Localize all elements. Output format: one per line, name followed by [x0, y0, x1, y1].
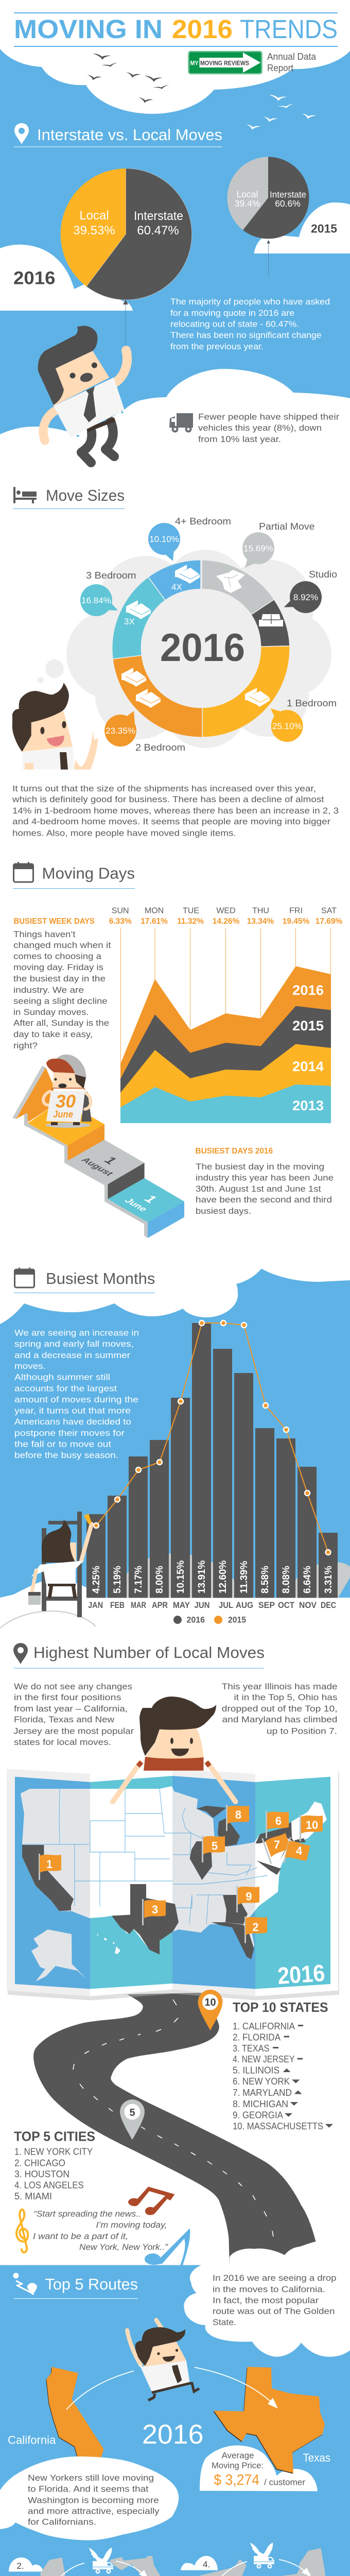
bar values: 8.08%	[281, 1566, 292, 1594]
route 4: massachusetts to new york: 4.	[203, 2560, 210, 2569]
text: local left: Jersey are the most popular	[13, 1726, 134, 1736]
route 2: new york to florida: 2.	[16, 2561, 24, 2571]
top 5 cities list: 5. MIAMI	[14, 2191, 52, 2201]
heading: moving days	[13, 862, 135, 889]
dark states	[22, 1806, 306, 1959]
text: seasons: and a decrease in summer	[14, 1350, 130, 1360]
sky panel: top 5 routes	[0, 2265, 350, 2576]
icon: truck	[169, 413, 193, 433]
weekday table header: THU	[252, 906, 269, 915]
text: busiest week days: industry. We are	[13, 985, 84, 995]
map pin: 5	[120, 2099, 145, 2140]
state flags: 9	[246, 1890, 252, 1903]
heading: top 5 routes: Top 5 Routes	[45, 2275, 138, 2293]
callout: 3 bedroom: 16.84%	[81, 596, 111, 605]
cloud callout: california drop: State.	[213, 2317, 236, 2327]
bar values: 3.31%	[323, 1566, 334, 1594]
weekday table header: SAT	[321, 906, 337, 915]
isometric steps: 1	[141, 1193, 161, 1205]
weekday table header: BUSIEST WEEK DAYS	[13, 917, 95, 926]
route arrows	[66, 2367, 278, 2410]
character: painter on ladder	[0, 1512, 96, 1628]
pie chart 2015: 60.6%	[275, 198, 301, 209]
text: seasons: before the busy season.	[14, 1450, 118, 1460]
text: busiest week days: in Sunday moves.	[13, 1007, 89, 1017]
heading: interstate vs local	[14, 123, 222, 147]
weekday table header: 6.33%	[109, 917, 132, 926]
pie chart 2016	[61, 168, 192, 300]
text: vehicles: from 10% last year.	[198, 434, 281, 444]
sky panel: busiest months	[0, 1268, 350, 1598]
state flags: 1	[46, 1858, 52, 1871]
callout: 1 bedroom: 25.10%	[272, 721, 302, 731]
text: busiest week days: right?	[13, 1041, 38, 1050]
cloud callout: california drop: route was out of The Golden	[213, 2306, 335, 2316]
state flags: 10	[306, 1819, 318, 1832]
callout: partial move	[242, 521, 315, 568]
report label: Annual Data	[267, 52, 317, 62]
weekday table header: MON	[145, 906, 164, 915]
bar values	[91, 1560, 334, 1594]
weekday table header: FRI	[289, 906, 303, 915]
isometric steps: August	[79, 1156, 116, 1177]
text: busiest week days: the busiest day in the	[13, 974, 106, 984]
route 2: new york to florida	[9, 2548, 171, 2576]
pie chart 2016: 60.47%	[137, 224, 179, 238]
text: local left: from last year – California,	[14, 1704, 128, 1714]
cloud callout: new yorkers: for Californians.	[28, 2517, 96, 2527]
top 5 cities list	[14, 2099, 145, 2201]
title	[14, 12, 338, 47]
heading: interstate vs local: Interstate vs. Local Moves	[37, 126, 222, 144]
year label: 2016	[142, 2419, 204, 2450]
text: shipment sizes	[12, 784, 339, 838]
callout: studio	[284, 569, 337, 613]
text: local right: This year Illinois has made	[222, 1682, 338, 1691]
text: busiest week days: seeing a slight decline	[13, 996, 108, 1006]
callout: partial move: Partial Move	[259, 521, 315, 532]
song lyric: “Start spreading the news..	[33, 2209, 141, 2218]
map pin: 5: 5	[129, 2107, 135, 2119]
report label: Report	[267, 63, 293, 73]
text: vehicles: vehicles this year (8%), down	[198, 423, 322, 433]
song lyric	[33, 2209, 168, 2252]
sky panel: header and interstate vs local	[0, 0, 350, 443]
price cloud	[200, 2445, 318, 2491]
bottom cloud of sky panel	[0, 369, 350, 453]
month labels: APR	[152, 1600, 168, 1610]
callout: 4+ bedroom: 4+ Bedroom	[175, 516, 231, 527]
cloud callout: new yorkers: and more attractive, especially	[28, 2506, 160, 2516]
donut center year: 2016	[160, 626, 245, 670]
text: majority: The majority of people who have asked	[170, 297, 330, 307]
month labels: JAN	[88, 1600, 103, 1610]
heading: moving days: Moving Days	[42, 865, 135, 883]
donut chart	[112, 560, 290, 737]
top 5 cities list: TOP 5 CITIES	[14, 2129, 95, 2144]
month labels: JUL	[219, 1600, 233, 1610]
text: local right	[222, 1682, 338, 1736]
text: busiest week days: day to take it easy,	[13, 1029, 93, 1039]
top 10 states list: 4. NEW JERSEY	[233, 2054, 294, 2064]
weekday table header: 19.45%	[283, 917, 309, 926]
heading: busiest months	[14, 1267, 155, 1293]
state: texas: Texas	[303, 2451, 330, 2464]
month labels: OCT	[278, 1600, 295, 1610]
heading: highest number of local moves	[13, 1643, 265, 1668]
month labels: AUG	[236, 1600, 253, 1610]
text: local right: dropped out of the Top 10,	[222, 1704, 338, 1714]
text: busiest days: BUSIEST DAYS 2016	[196, 1147, 273, 1156]
callout: 1 bedroom: 1 Bedroom	[287, 698, 337, 708]
cloud 2016	[0, 245, 133, 311]
pie chart 2016: 39.53%	[73, 224, 115, 238]
text: seasons	[14, 1328, 139, 1460]
callout: 4+ bedroom: 10.10%	[149, 534, 179, 544]
callout: 2 bedroom	[104, 711, 185, 753]
average moving price: Moving Price:	[212, 2461, 264, 2470]
weekday table header: WED	[216, 906, 236, 915]
character: man with calendar	[43, 1055, 92, 1128]
cloud callout: new yorkers: New Yorkers still love moving	[28, 2473, 154, 2483]
state: texas	[213, 2367, 330, 2474]
weekday table header: TUE	[183, 906, 199, 915]
text: local left: in the first four positions	[14, 1692, 121, 1702]
top 10 states list: 8. MICHIGAN	[233, 2098, 288, 2109]
heading: busiest months: Busiest Months	[46, 1269, 155, 1287]
birds white	[246, 95, 316, 132]
weekday table header: 14.26%	[213, 917, 239, 926]
character: thinking man	[12, 683, 98, 770]
bar values: 11.39%	[239, 1561, 250, 1594]
callout: 3 bedroom: 3 Bedroom	[86, 570, 136, 581]
road with route	[33, 1993, 319, 2267]
average moving price: Average	[221, 2450, 254, 2460]
cloud 2015	[254, 202, 350, 253]
top 10 states list: 1. CALIFORNIA	[233, 2021, 295, 2031]
text: busiest days: busiest days.	[196, 1206, 251, 1216]
area chart: moving days	[120, 928, 331, 1123]
legend	[173, 1615, 246, 1625]
text: seasons: postpone their moves for	[14, 1428, 125, 1438]
top 10 states list: 6. NEW YORK	[233, 2076, 290, 2087]
character: man over map	[113, 1697, 236, 1802]
bar values: 8.00%	[154, 1566, 165, 1594]
song lyric: I’m moving today,	[96, 2220, 167, 2230]
cloud 2016: 2016	[13, 268, 56, 289]
state flags: 2	[252, 1921, 259, 1934]
folded map	[7, 1768, 339, 2001]
logo: my moving reviews sign: MOVING REVIEWS	[200, 60, 249, 67]
music notes	[16, 2187, 190, 2265]
cloud callout: new yorkers: to Florida. And it seems that	[28, 2484, 149, 2494]
legend: 2016	[186, 1615, 205, 1625]
text: local left	[13, 1682, 134, 1747]
text: busiest days: have been the second and third	[196, 1195, 332, 1205]
cloud callout: california drop	[184, 2239, 350, 2357]
text: local left: We do not see any changes	[14, 1682, 132, 1691]
bar values: 6.64%	[302, 1566, 313, 1594]
text: local right: it in the Top 5, Ohio has	[234, 1692, 338, 1702]
character: man with calendar: June	[53, 1109, 73, 1120]
weekday table header: 13.34%	[247, 917, 274, 926]
area chart: moving days: 2015	[292, 1018, 324, 1033]
area chart: moving days: 2013	[292, 1098, 324, 1113]
logo: my moving reviews sign	[188, 51, 262, 74]
text: seasons: Although summer still	[14, 1372, 110, 1382]
song lyric: I want to be a part of it,	[33, 2231, 128, 2241]
line chart 2015	[94, 1320, 330, 1555]
cloud 2015: 2015	[311, 222, 337, 235]
text: busiest week days	[13, 929, 111, 1050]
weekday table header: 17.69%	[316, 917, 342, 926]
month labels: MAY	[173, 1600, 190, 1610]
text: seasons: We are seeing an increase in	[14, 1328, 139, 1338]
text: local right: up to Position 7.	[267, 1726, 337, 1736]
text: shipment sizes: It turns out that the size of the shipments has increased over this year,	[12, 784, 316, 793]
area chart: moving days: 2016	[292, 982, 324, 998]
top 5 cities list: 4. LOS ANGELES	[14, 2180, 84, 2191]
title: 2016	[172, 14, 233, 44]
text: shipment sizes: and 4-bedroom home moves. It seems that people are moving into bigger	[12, 817, 330, 826]
pie chart 2015: Local	[237, 189, 258, 199]
weekday table header: SUN	[112, 906, 129, 915]
pie chart 2015: Interstate	[270, 190, 306, 200]
heading: top 5 routes	[13, 2273, 138, 2299]
text: busiest days	[196, 1147, 334, 1216]
map pin: 10: 10	[204, 1997, 216, 2008]
character: man with calendar: 30	[56, 1091, 76, 1112]
map pin: 10	[198, 1990, 222, 2030]
callout: 2 bedroom: 2 Bedroom	[135, 742, 185, 753]
bar values: 7.17%	[133, 1566, 144, 1594]
state: california: California	[8, 2433, 56, 2446]
character: jumping man	[127, 2320, 199, 2400]
top 10 states list	[198, 1990, 333, 2131]
top 10 states list: 10. MASSACHUSETTS	[233, 2121, 323, 2131]
text: majority	[170, 297, 330, 351]
state flags: 7	[274, 1838, 280, 1851]
weekday table header: 17.61%	[141, 917, 168, 926]
month labels	[88, 1600, 336, 1610]
pie chart 2016: Interstate	[134, 209, 183, 223]
map year: 2016	[276, 1959, 326, 1989]
month labels: MAR	[131, 1600, 146, 1610]
month labels: NOV	[299, 1600, 317, 1610]
title: TRENDS	[240, 14, 338, 44]
text: busiest week days: comes to choosing a	[13, 952, 102, 961]
pie chart 2015: 39.4%	[235, 198, 260, 209]
text: busiest days: The busiest day in the moving	[196, 1162, 324, 1172]
text: vehicles: Fewer people have shipped their	[198, 412, 339, 421]
text: seasons: the fall or to move out	[14, 1439, 111, 1449]
callout: 2 bedroom: 23.35%	[106, 726, 135, 736]
text: local left: states for local moves.	[14, 1737, 111, 1747]
cloud callout: california drop: In fact, the most popular	[213, 2296, 319, 2305]
area chart: moving days: 2014	[292, 1059, 324, 1074]
callout: 3 bedroom	[80, 570, 136, 616]
cloud callout: new yorkers: Washington is becoming more	[28, 2495, 159, 2505]
text: majority: from the previous year.	[170, 342, 264, 351]
bar values: 5.19%	[112, 1566, 123, 1594]
month labels: SEP	[258, 1600, 275, 1610]
text: busiest week days: changed much when it	[13, 940, 111, 950]
text: busiest days: 30th. August 1st and June 1st	[196, 1184, 321, 1194]
average moving price: $ 3,274	[214, 2472, 259, 2488]
text: vehicles	[198, 412, 339, 444]
title: MOVING IN	[14, 14, 163, 44]
callout: studio: 8.92%	[293, 592, 318, 602]
state flags: 5	[212, 1839, 218, 1853]
donut icons: 3X	[124, 617, 135, 626]
legend: 2015	[228, 1615, 246, 1625]
report label	[267, 52, 317, 73]
heading: move sizes	[13, 486, 125, 509]
character: hanging man	[38, 326, 127, 463]
average moving price: / customer	[264, 2478, 305, 2487]
top 10 states list: 9. GEORGIA	[233, 2110, 284, 2121]
text: majority: for a moving quote in 2016 are	[170, 308, 294, 318]
song lyric: New York, New York..”	[79, 2242, 168, 2252]
bar values: 4.25%	[91, 1566, 102, 1594]
text: shipment sizes: homes. Also, more people have moved single items.	[12, 828, 236, 838]
text: seasons: accounts for the largest	[14, 1384, 117, 1394]
top 5 cities list: 3. HOUSTON	[14, 2168, 69, 2179]
text: local left: Florida, Texas and New	[14, 1715, 115, 1724]
route 4: massachusetts to new york	[181, 2543, 343, 2576]
month labels: FEB	[110, 1600, 125, 1610]
callout: partial move: 15.69%	[243, 544, 273, 553]
weekday table header	[13, 906, 342, 926]
text: local right: and Maryland has climbed	[222, 1715, 338, 1724]
thought cloud	[38, 550, 331, 748]
bar chart: busiest months	[86, 1323, 338, 1610]
isometric steps: 1	[100, 1155, 121, 1166]
pie chart 2015	[227, 157, 309, 239]
callout: 1 bedroom	[271, 698, 337, 742]
isometric steps	[12, 1065, 184, 1238]
text: shipment sizes: 14% in 1-bedroom home moves, whereas there has been an increase in 2, 3	[12, 806, 339, 816]
donut icons: 4X	[171, 582, 182, 592]
cloud callout: new yorkers	[0, 2456, 179, 2540]
top 10 states list: 3. TEXAS	[233, 2043, 269, 2054]
hills behind bars	[0, 1553, 350, 1598]
birds dark	[86, 54, 170, 105]
heading: highest number of local moves: Highest Number of Local Moves	[33, 1643, 265, 1662]
state flags: 4	[296, 1844, 303, 1857]
text: busiest days: industry this year has been June	[196, 1173, 334, 1183]
text: majority: relocating out of state - 60.47%.	[170, 319, 299, 329]
state flags: 3	[152, 1903, 158, 1916]
top 10 states list: 5. ILLINOIS	[233, 2065, 279, 2076]
text: majority: There has been no significant change	[170, 330, 321, 340]
balloon strings	[123, 240, 270, 346]
callout: studio: Studio	[309, 569, 337, 580]
top 10 states list: 2. FLORIDA	[233, 2032, 281, 2042]
text: seasons: year, it turns out that more	[14, 1406, 131, 1416]
text: seasons: spring and early fall moves,	[14, 1339, 134, 1349]
bar values: 12.60%	[218, 1560, 229, 1594]
top 10 states list: 7. MARYLAND	[233, 2087, 292, 2098]
text: busiest week days: Things haven’t	[13, 929, 76, 939]
donut callouts	[80, 516, 337, 753]
logo: my moving reviews sign: MY	[190, 60, 199, 67]
state flags: 8	[235, 1808, 241, 1821]
state: california	[8, 2367, 104, 2463]
text: seasons: moves.	[14, 1361, 46, 1371]
bar values: 10.15%	[176, 1560, 186, 1594]
text: seasons: amount of moves during the	[14, 1395, 138, 1404]
donut icons	[121, 565, 283, 707]
text: busiest week days: After all, Sunday is the	[13, 1018, 109, 1028]
top cloud	[0, 0, 350, 114]
bar values: 13.91%	[197, 1560, 207, 1594]
top 10 states list: TOP 10 STATES	[233, 1999, 328, 2015]
text: seasons: Americans have decided to	[14, 1417, 131, 1427]
isometric steps: June	[122, 1197, 150, 1213]
cloud callout: california drop: in the moves to California.	[213, 2284, 325, 2294]
state flags: 6	[275, 1815, 282, 1827]
callout: 4+ bedroom	[148, 516, 231, 561]
text: busiest week days: moving day. Friday is	[13, 962, 103, 972]
average moving price	[212, 2450, 305, 2488]
cloud callout: california drop: In 2016 we are seeing a drop	[213, 2273, 337, 2283]
state flags	[39, 1805, 323, 1943]
alaska and hawaii	[31, 1929, 120, 1981]
month labels: JUN	[195, 1600, 210, 1610]
bar values: 8.58%	[260, 1566, 271, 1594]
month labels: DEC	[321, 1600, 336, 1610]
pie chart 2016: Local	[79, 209, 109, 223]
top 5 cities list: 2. CHICAGO	[14, 2158, 65, 2168]
weekday table header: 11.32%	[177, 917, 204, 926]
text: shipment sizes: which is definitely good for business. There has been a decline of almost	[12, 794, 324, 804]
heading: move sizes: Move Sizes	[46, 486, 125, 504]
top 5 cities list: 1. NEW YORK CITY	[14, 2146, 93, 2157]
